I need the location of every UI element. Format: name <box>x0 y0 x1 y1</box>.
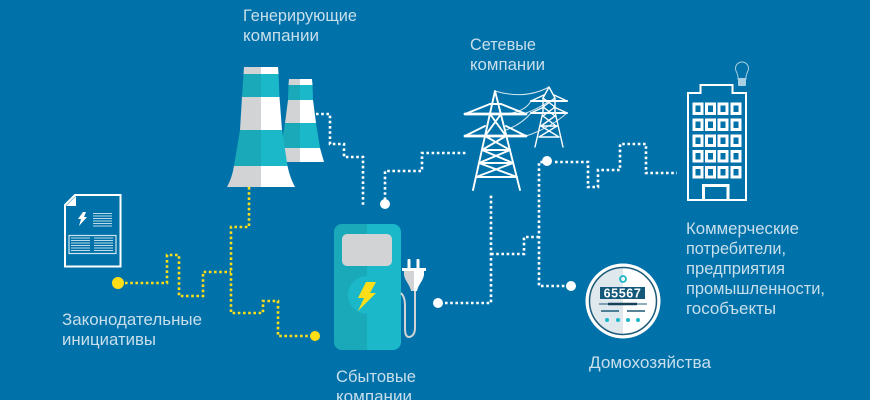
icon: light bulb <box>736 62 748 86</box>
heading: grid companies <box>470 36 545 74</box>
text: sales companies: Сбытовые <box>336 368 416 386</box>
meter display <box>600 287 645 299</box>
text: sales companies <box>336 368 416 400</box>
heading: generating companies: Генерирующие <box>243 7 357 25</box>
door <box>704 186 728 200</box>
lightning glyph <box>78 212 87 226</box>
large cooling tower <box>227 67 295 187</box>
cable <box>401 288 415 337</box>
connector: grid companies to sales node <box>380 153 466 209</box>
icon: power transmission towers <box>465 87 567 190</box>
icon: charging station <box>334 224 426 350</box>
text: commercial consumers: предприятия <box>686 260 785 278</box>
body <box>334 224 401 350</box>
text: legislative initiatives <box>62 311 202 349</box>
screen <box>342 234 392 266</box>
text: legislative initiatives: Законодательные <box>62 311 202 329</box>
plug <box>402 259 426 291</box>
lightning bolt <box>358 282 376 311</box>
windows <box>694 104 740 177</box>
text: commercial consumers: Коммерческие <box>686 220 799 238</box>
text: commercial consumers: промышленности, <box>686 280 825 298</box>
wires <box>495 87 567 136</box>
heading: grid companies: Сетевые <box>470 36 536 54</box>
icon: electricity meter <box>586 264 660 338</box>
connector: sales company to grid, consumers and households <box>433 144 677 308</box>
icon: legislative document <box>65 195 120 266</box>
heading: grid companies: компании <box>470 56 545 74</box>
text: households: Домохозяйства <box>589 354 712 372</box>
icon: office building <box>688 85 746 200</box>
text: legislative initiatives: инициативы <box>62 331 156 349</box>
heading: generating companies: компании <box>243 27 319 45</box>
text lines <box>71 214 113 250</box>
circle behind bolt <box>348 276 367 314</box>
connector: small cooling tower to sales company <box>316 114 363 206</box>
connector: yellow regulatory lines <box>112 187 320 341</box>
icon: electricity meter: 65567 <box>604 286 641 300</box>
small cooling tower <box>277 79 324 162</box>
indicator dots <box>605 318 640 322</box>
text: commercial consumers: потребители, <box>686 240 786 258</box>
text: commercial consumers: гособъекты <box>686 300 776 318</box>
text: commercial consumers <box>686 220 825 318</box>
large pylon <box>465 91 526 190</box>
small pylon <box>531 87 567 147</box>
icon: cooling towers <box>227 67 324 187</box>
heading: generating companies <box>243 7 357 45</box>
